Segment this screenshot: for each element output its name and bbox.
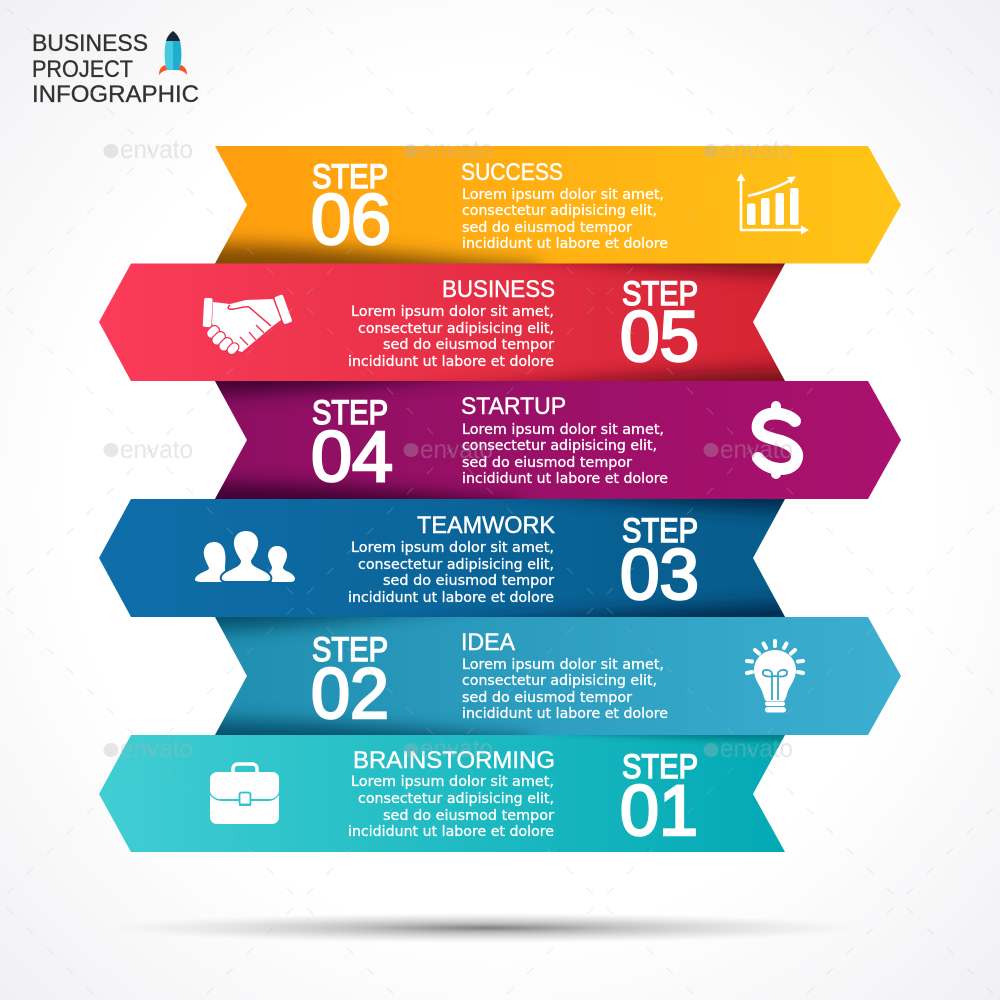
heading: STARTUP (461, 393, 566, 420)
icon: light bulb (747, 641, 803, 712)
title: BUSINESS (32, 30, 148, 57)
icon: rocket (159, 31, 187, 75)
heading: BRAINSTORMING (353, 747, 555, 774)
title: INFOGRAPHIC (32, 81, 199, 108)
body text (462, 657, 668, 722)
body text: incididunt ut labore et dolore (348, 824, 554, 840)
heading: TEAMWORK (417, 512, 555, 539)
ribbon: step 02 idea (215, 617, 901, 735)
watermarks: envato: envato (120, 134, 193, 164)
body text: Lorem ipsum dolor sit amet, (351, 774, 554, 790)
body text: Lorem ipsum dolor sit amet, (462, 422, 664, 438)
body text (348, 540, 554, 606)
body text: incididunt ut labore et dolore (462, 236, 668, 252)
body text: Lorem ipsum dolor sit amet, (351, 540, 554, 556)
body text: incididunt ut labore et dolore (348, 590, 554, 606)
ribbon: step 06 success (215, 146, 901, 264)
watermarks: envato: envato (720, 134, 793, 164)
watermarks: envato: envato (420, 134, 493, 164)
body text (462, 422, 668, 487)
body text: sed do eiusmod tempor (383, 337, 554, 353)
step number: 04 (311, 418, 393, 497)
body text (348, 304, 554, 370)
watermarks: envato: envato (420, 434, 493, 464)
step label: STEP (312, 394, 388, 432)
step number: 05 (620, 298, 699, 377)
body text: sed do eiusmod tempor (383, 808, 554, 824)
icon: handshake (203, 294, 292, 356)
body text: sed do eiusmod tempor (462, 690, 632, 706)
icon: growth chart (736, 173, 809, 234)
body text: consectetur adipisicing elit, (358, 321, 554, 337)
icon: briefcase (210, 764, 279, 824)
body text: incididunt ut labore et dolore (462, 471, 668, 487)
ribbon: step 01 brainstorming (99, 727, 810, 852)
watermarks: envato: envato (720, 434, 793, 464)
step number: 06 (311, 181, 391, 260)
body text: sed do eiusmod tempor (462, 455, 632, 471)
step label: STEP (622, 275, 698, 313)
body text: consectetur adipisicing elit, (358, 557, 554, 573)
ribbon: step 04 startup (215, 381, 901, 499)
body text: Lorem ipsum dolor sit amet, (351, 304, 554, 320)
step number: 02 (311, 655, 389, 734)
icon: team of people (195, 530, 295, 582)
body text: sed do eiusmod tempor (462, 220, 632, 236)
watermarks: envato: envato (420, 733, 493, 763)
body text: consectetur adipisicing elit, (462, 438, 657, 454)
watermarks: envato: envato (720, 733, 793, 763)
step number: 01 (620, 772, 698, 851)
step label: STEP (622, 748, 698, 786)
body text: consectetur adipisicing elit, (462, 203, 657, 219)
heading: SUCCESS (461, 159, 563, 186)
step label: STEP (622, 512, 698, 550)
ribbon: step 05 business (99, 264, 785, 381)
watermarks: envato: envato (120, 733, 193, 763)
body text (462, 187, 668, 252)
body text: consectetur adipisicing elit, (358, 791, 554, 807)
ribbon: step 03 teamwork (99, 499, 785, 617)
step number: 03 (620, 536, 699, 615)
body text: incididunt ut labore et dolore (348, 354, 554, 370)
body text: Lorem ipsum dolor sit amet, (462, 187, 664, 203)
step label: STEP (312, 158, 388, 196)
step label: STEP (312, 631, 388, 669)
body text: consectetur adipisicing elit, (462, 673, 657, 689)
heading: BUSINESS (442, 276, 555, 303)
body text: sed do eiusmod tempor (383, 573, 554, 589)
icon: dollar sign (758, 406, 797, 474)
body text: incididunt ut labore et dolore (462, 706, 668, 722)
watermarks: envato: envato (120, 434, 193, 464)
heading: IDEA (461, 629, 515, 656)
title (32, 30, 199, 108)
floor shadow (111, 913, 861, 943)
watermarks: envato (104, 134, 793, 763)
body text (348, 774, 554, 840)
title: PROJECT (32, 56, 133, 83)
body text: Lorem ipsum dolor sit amet, (462, 657, 664, 673)
